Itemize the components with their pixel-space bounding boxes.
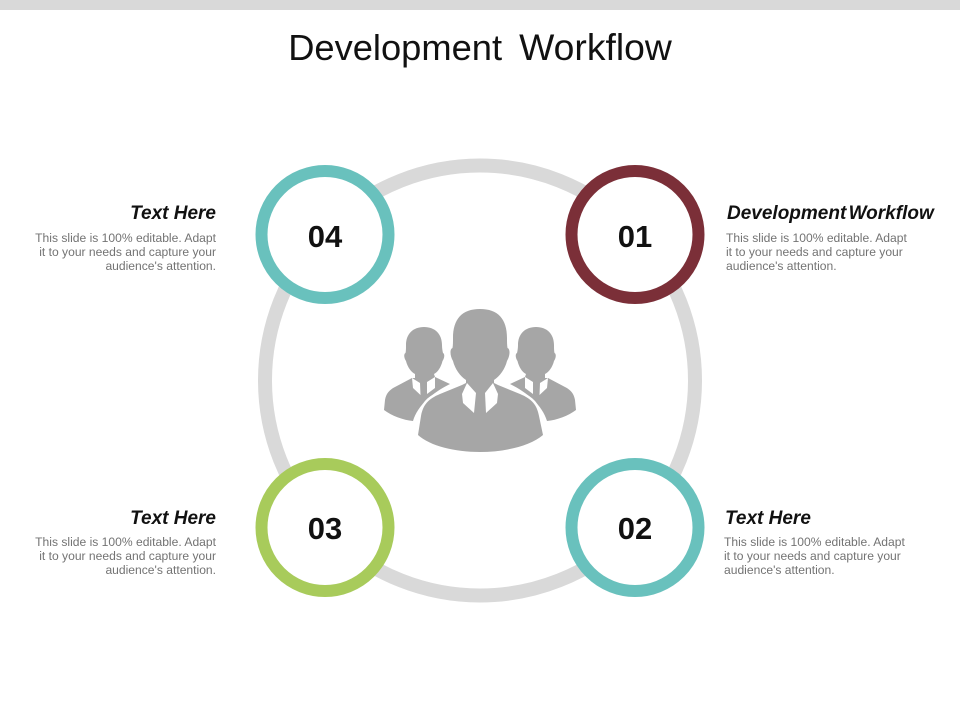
text block 02: This slide is 100% editable. Adapt xyxy=(724,535,905,549)
text block 01: audience's attention. xyxy=(726,259,837,273)
text block 01: Development Workflow xyxy=(727,203,934,224)
text block 04 xyxy=(35,203,216,273)
text block 03: audience's attention. xyxy=(105,563,216,577)
text block 03 xyxy=(35,508,216,577)
text block 02: it to your needs and capture your xyxy=(724,549,901,563)
text block 03: Text Here xyxy=(130,508,216,529)
circle 01: 01 xyxy=(618,219,652,254)
title: Development Workflow xyxy=(288,26,672,68)
text block 01 xyxy=(726,203,935,273)
circle 02 xyxy=(572,464,698,591)
circle 03: 03 xyxy=(308,511,342,546)
text block 04: it to your needs and capture your xyxy=(39,245,216,259)
right person xyxy=(510,327,576,421)
text block 02: Text Here xyxy=(725,508,811,529)
text block 01: This slide is 100% editable. Adapt xyxy=(726,231,907,245)
text block 02: audience's attention. xyxy=(724,563,835,577)
center person xyxy=(418,309,543,452)
circle 03 xyxy=(262,464,388,591)
circle 04 xyxy=(262,171,388,298)
text block 03: it to your needs and capture your xyxy=(39,549,216,563)
circle 01 xyxy=(572,171,698,298)
text block 04: This slide is 100% editable. Adapt xyxy=(35,231,216,245)
text block 02 xyxy=(724,508,905,577)
top bar xyxy=(0,0,960,10)
left person xyxy=(384,327,450,421)
text block 01: it to your needs and capture your xyxy=(726,245,903,259)
text block 03: This slide is 100% editable. Adapt xyxy=(35,535,216,549)
circle 02: 02 xyxy=(618,511,652,546)
text block 04: audience's attention. xyxy=(105,259,216,273)
circle 04: 04 xyxy=(308,219,343,254)
outer grey ring xyxy=(265,166,695,596)
icon: three business people xyxy=(384,309,576,452)
text block 04: Text Here xyxy=(130,203,216,224)
